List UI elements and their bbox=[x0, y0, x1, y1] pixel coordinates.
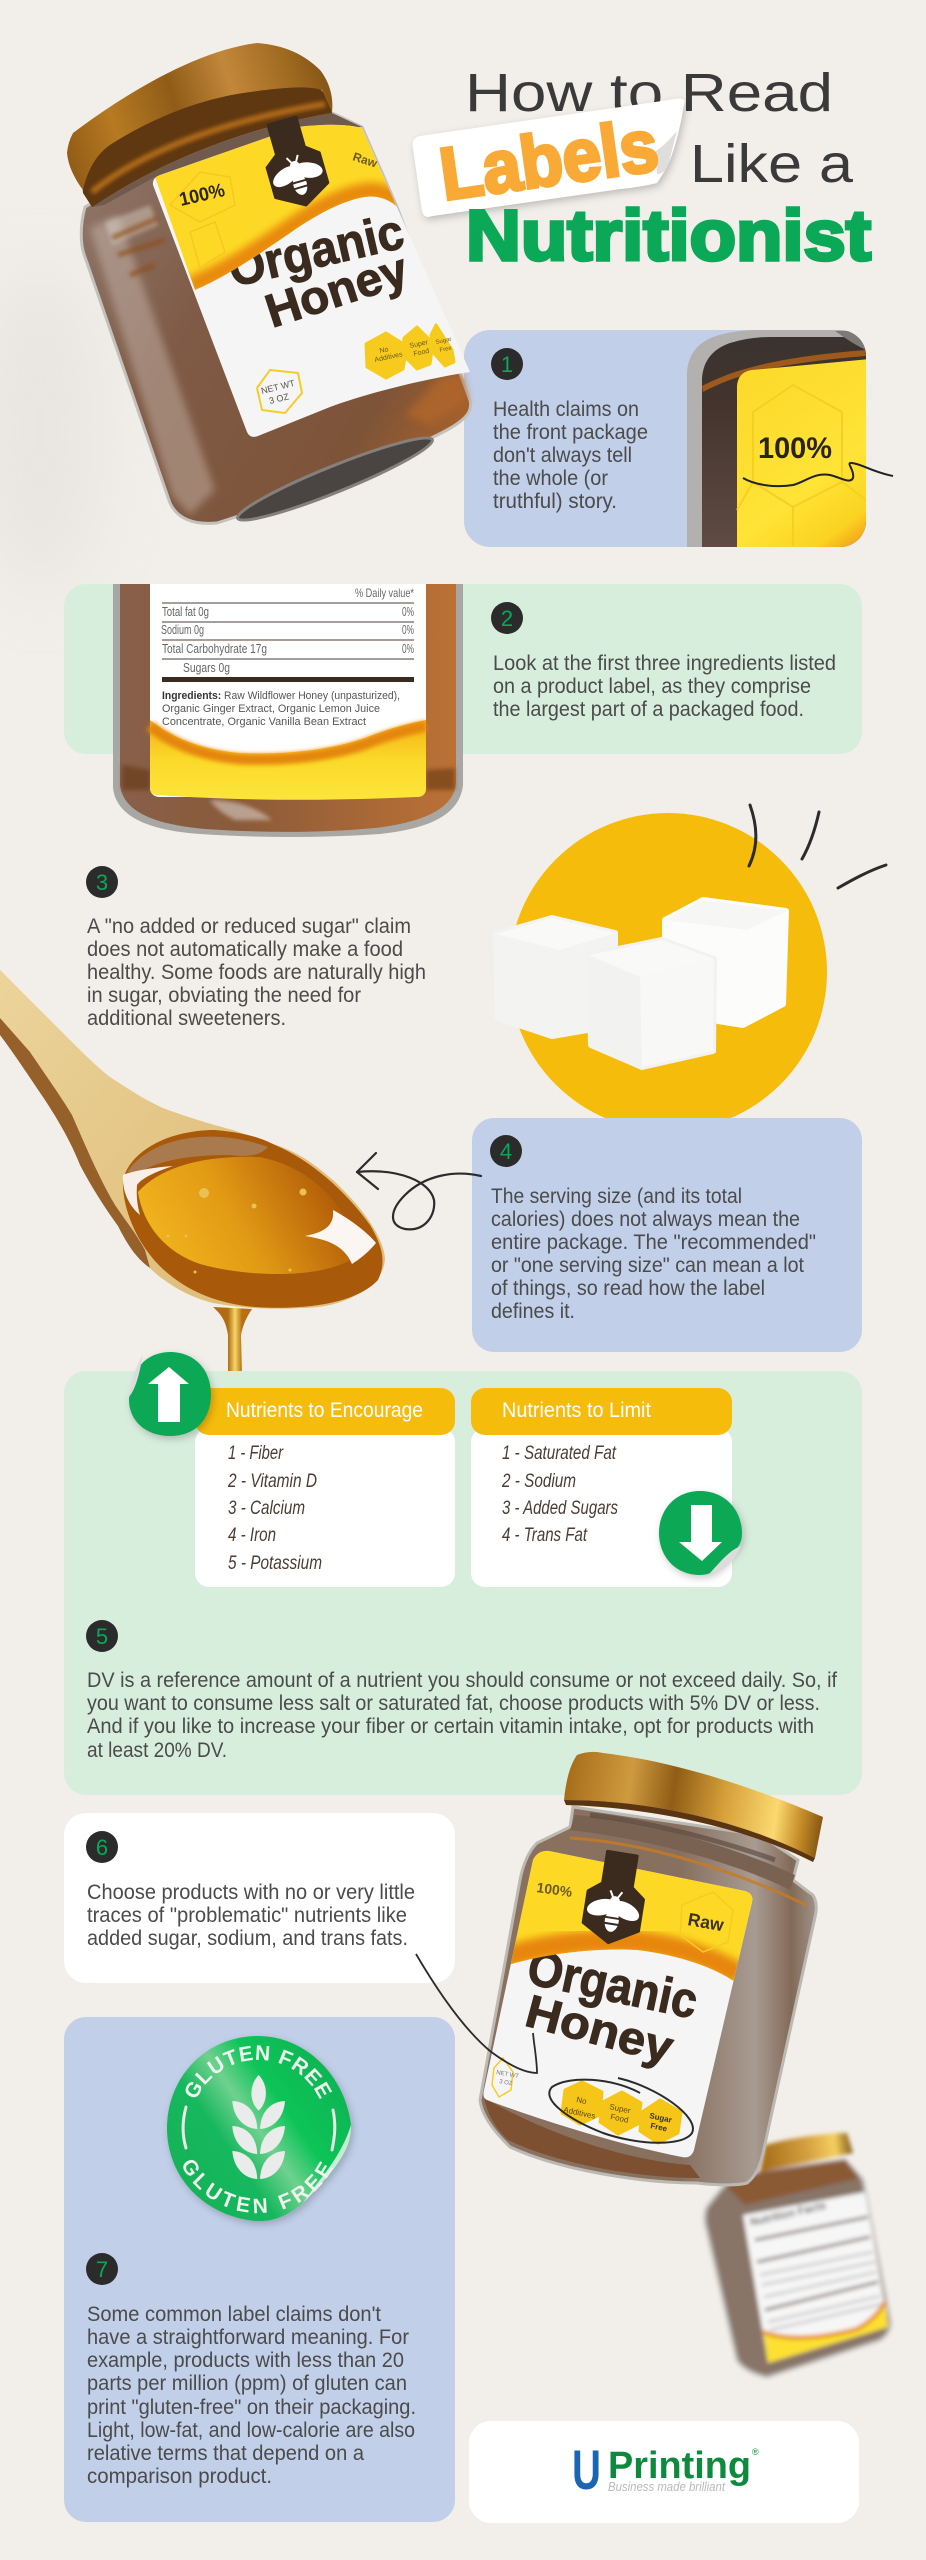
Raw badge: Raw bbox=[351, 150, 379, 171]
arrow to spoon bbox=[357, 1153, 481, 1229]
jar neck bbox=[92, 113, 362, 207]
nutrition label: Ingredients: Raw Wildflower Honey (unpasturized), bbox=[162, 690, 400, 702]
number badge 5: 5 bbox=[96, 1624, 108, 1649]
sugar cube back bbox=[665, 900, 786, 1025]
hexagon claims: Additives bbox=[563, 2105, 596, 2121]
spoon side shadow bbox=[0, 1018, 150, 1268]
net weight badge: 3 OZ bbox=[268, 391, 290, 406]
number badge 5 bbox=[86, 1620, 118, 1652]
panel 7 text: Light, low-fat, and low-calorie are also bbox=[87, 2419, 415, 2442]
icon: down arrow sticker bbox=[659, 1491, 742, 1575]
honey drip bbox=[213, 1307, 252, 1374]
title line: How to Read: How to Read bbox=[465, 63, 833, 123]
number badge 1 bbox=[491, 348, 523, 380]
logo panel bbox=[469, 2421, 859, 2523]
logo: UPrinting: Printing bbox=[608, 2445, 751, 2487]
net weight badge: NET WT bbox=[496, 2070, 520, 2080]
panel 5 text: at least 20% DV. bbox=[87, 1739, 227, 1762]
jar label bbox=[153, 113, 470, 437]
yellow band bbox=[155, 125, 397, 290]
back jar lid bbox=[760, 2133, 853, 2172]
Raw badge bbox=[680, 1892, 733, 1952]
icon: up arrow sticker bbox=[129, 1352, 211, 1436]
panel 6 text bbox=[87, 1881, 415, 1950]
jar lid bbox=[67, 43, 332, 190]
panel 1 text: the whole (or bbox=[493, 467, 608, 490]
number badge 7 bbox=[86, 2253, 118, 2285]
table: nutrients to limit: Nutrients to Limit bbox=[502, 1399, 651, 1422]
product name line 2: Honey bbox=[259, 242, 414, 338]
emphasis ticks bbox=[749, 805, 886, 888]
panel 4 text: defines it. bbox=[491, 1300, 575, 1323]
logo: UPrinting bbox=[572, 2438, 759, 2501]
bee logo bbox=[255, 113, 333, 213]
title line: Like a: Like a bbox=[690, 134, 854, 194]
number badge 2 bbox=[491, 602, 523, 634]
nutrition label: % Daily value* bbox=[355, 586, 414, 600]
spoon handle and bowl bbox=[0, 970, 385, 1309]
number badge 1: 1 bbox=[501, 352, 513, 377]
hexagon claims: Super bbox=[609, 2102, 632, 2115]
panel 5 background bbox=[64, 1371, 862, 1795]
panel 7 text: relative terms that depend on a bbox=[87, 2442, 364, 2465]
panel 4 text: calories) does not always mean the bbox=[491, 1208, 800, 1231]
table: nutrients to encourage: 2 - Vitamin D bbox=[227, 1471, 317, 1492]
nutrition label: 0% bbox=[402, 604, 414, 619]
title bbox=[413, 63, 871, 276]
panel 7 text bbox=[87, 2303, 416, 2488]
panel 6 text: traces of "problematic" nutrients like bbox=[87, 1904, 407, 1927]
logo: UPrinting: ® bbox=[752, 2447, 759, 2457]
panel 5: daily value bbox=[64, 1371, 862, 1795]
panel 2 background bbox=[64, 584, 862, 754]
panel 3 text: in sugar, obviating the need for bbox=[87, 984, 361, 1007]
table: nutrients to encourage bbox=[195, 1388, 455, 1587]
panel 3: no added sugar bbox=[86, 866, 426, 1030]
hand-drawn circle around claims bbox=[549, 2078, 693, 2143]
panel 7 text: parts per million (ppm) of gluten can bbox=[87, 2372, 407, 2395]
honey jar 1 bbox=[67, 43, 471, 530]
nutrition label: Total fat 0g bbox=[162, 604, 209, 619]
panel 1 text: don't always tell bbox=[493, 444, 632, 467]
panel 5 text: DV is a reference amount of a nutrient you should consume or not exceed daily. So, if bbox=[87, 1669, 837, 1692]
panel 1 text: the front package bbox=[493, 421, 648, 444]
sticker bottom text: GLUTEN FREE bbox=[183, 2160, 333, 2214]
jar body bbox=[480, 1807, 816, 2185]
table: nutrients to limit: 1 - Saturated Fat bbox=[502, 1443, 617, 1464]
icon: wheat bbox=[232, 2075, 285, 2179]
title line: Nutritionist: Nutritionist bbox=[466, 197, 871, 276]
hexagon claims bbox=[366, 325, 454, 378]
panel 6 background bbox=[64, 1813, 455, 1983]
table: nutrients to encourage: Nutrients to Encourage bbox=[226, 1399, 423, 1422]
hexagon claims: No bbox=[379, 346, 389, 355]
number badge 6 bbox=[86, 1831, 118, 1863]
panel 3 text: A "no added or reduced sugar" claim bbox=[87, 915, 411, 938]
panel 7 text: have a straightforward meaning. For bbox=[87, 2326, 409, 2349]
jar body bbox=[81, 113, 471, 523]
panel 6: problematic nutrients bbox=[64, 1813, 455, 1983]
hexagon claims: Food bbox=[413, 348, 430, 358]
jar neck bbox=[570, 1815, 795, 1890]
table: nutrients to encourage: 1 - Fiber bbox=[228, 1443, 284, 1464]
jar close-up with 100% label bbox=[687, 330, 866, 547]
100% badge: 100% bbox=[177, 180, 227, 211]
panel 7 text: example, products with less than 20 bbox=[87, 2349, 404, 2372]
number badge 6: 6 bbox=[96, 1835, 108, 1860]
back jar body bbox=[705, 2160, 890, 2377]
panel 5 text: And if you like to increase your fiber or certain vitamin intake, opt for products with bbox=[87, 1715, 814, 1738]
hexagon claims: Free bbox=[650, 2121, 669, 2134]
bee logo bbox=[580, 1849, 651, 1947]
honey jar 2 bbox=[470, 1752, 823, 2185]
panel 2 text: on a product label, as they comprise bbox=[493, 675, 811, 698]
product name: Organic bbox=[523, 1939, 703, 2030]
hexagon claims: Free bbox=[439, 345, 453, 354]
nutrition label: Organic Ginger Extract, Organic Lemon Juice bbox=[162, 703, 380, 715]
panel 3 text: additional sweeteners. bbox=[87, 1007, 286, 1030]
panel 1 text: Health claims on bbox=[493, 398, 639, 421]
hexagon claims: Additives bbox=[374, 351, 404, 364]
panel 7: label claims bbox=[64, 2017, 455, 2522]
panel 1: health claims bbox=[464, 330, 893, 560]
number badge 7: 7 bbox=[96, 2257, 108, 2282]
hexagon claims: Sugar bbox=[435, 337, 452, 346]
pointer line from panel 6 to jar bbox=[416, 1954, 537, 2073]
jar lid bbox=[564, 1752, 823, 1858]
hexagon claims: Food bbox=[610, 2112, 629, 2125]
honey spoon bbox=[0, 970, 385, 1374]
net weight badge bbox=[257, 370, 302, 413]
panel 2 text: the largest part of a packaged food. bbox=[493, 698, 804, 721]
back jar label: Nutrition Facts bbox=[749, 2200, 827, 2229]
Raw badge: Raw bbox=[686, 1909, 726, 1935]
sugar cube left bbox=[496, 918, 615, 1036]
table: nutrients to encourage: 3 - Calcium bbox=[228, 1498, 305, 1519]
panel 5 text bbox=[87, 1669, 837, 1762]
nutrition label jar bbox=[113, 584, 463, 837]
honey pool bbox=[123, 1130, 383, 1308]
hexagon claims: Super bbox=[409, 339, 429, 350]
panel 2 text bbox=[493, 652, 836, 721]
yellow circle bbox=[509, 813, 827, 1131]
panel 4: serving size bbox=[472, 1118, 862, 1352]
panel 1 text bbox=[493, 398, 648, 513]
net weight badge bbox=[492, 2058, 520, 2097]
panel 4 background bbox=[472, 1118, 862, 1352]
panel 3 text: does not automatically make a food bbox=[87, 938, 403, 961]
table: nutrients to limit: 2 - Sodium bbox=[501, 1471, 576, 1492]
panel 4 text: entire package. The "recommended" bbox=[491, 1231, 816, 1254]
hexagon claims: No bbox=[576, 2095, 588, 2106]
sticker top text: GLUTEN FREE bbox=[186, 2045, 332, 2099]
product name: Organic bbox=[223, 203, 409, 298]
back jar label bbox=[743, 2192, 888, 2363]
nutrition label: Total Carbohydrate 17g bbox=[162, 641, 267, 656]
table: nutrients to limit bbox=[471, 1388, 732, 1587]
number badge 2: 2 bbox=[501, 606, 513, 631]
panel 4 text: The serving size (and its total bbox=[491, 1185, 742, 1208]
nutrition label: 0% bbox=[402, 622, 414, 637]
panel 6 text: Choose products with no or very little bbox=[87, 1881, 415, 1904]
sugar cubes illustration bbox=[496, 805, 886, 1131]
soft jar shadow bbox=[0, 260, 110, 600]
nutrition label: 0% bbox=[402, 641, 414, 656]
panel 3 text bbox=[87, 915, 426, 1030]
net weight badge: NET WT bbox=[260, 378, 296, 396]
logo: UPrinting: U bbox=[572, 2438, 601, 2501]
panel 7 text: comparison product. bbox=[87, 2465, 272, 2488]
nutrition label: Sodium 0g bbox=[161, 622, 204, 637]
logo: UPrinting: Business made brilliant bbox=[608, 2479, 726, 2494]
product name line 2: Honey bbox=[520, 1984, 679, 2074]
panel 7 background bbox=[64, 2017, 455, 2522]
panel 1 text: truthful) story. bbox=[493, 490, 617, 513]
panel 4 text: of things, so read how the label bbox=[491, 1277, 765, 1300]
panel 2: ingredients bbox=[64, 584, 862, 754]
nutrition label: Concentrate, Organic Vanilla Bean Extract bbox=[162, 716, 366, 728]
table: nutrients to encourage: 4 - Iron bbox=[228, 1525, 276, 1546]
jar label bbox=[483, 1850, 752, 2158]
table: nutrients to limit: 4 - Trans Fat bbox=[502, 1525, 588, 1546]
table: nutrients to limit: 3 - Added Sugars bbox=[502, 1498, 618, 1519]
squiggle underline bbox=[743, 463, 893, 486]
panel 1 background bbox=[464, 330, 866, 547]
panel 5 text: you want to consume less salt or saturated fat, choose products with 5% DV or less. bbox=[87, 1692, 820, 1715]
sticker: Labels: Labels bbox=[435, 103, 663, 216]
panel 7 text: Some common label claims don't bbox=[87, 2303, 381, 2326]
number badge 4: 4 bbox=[500, 1139, 512, 1164]
yellow band bbox=[510, 1850, 752, 1981]
table: nutrients to encourage: 5 - Potassium bbox=[228, 1553, 322, 1574]
nutrition label: Sugars 0g bbox=[183, 660, 230, 675]
jar close-up with 100% label: 100% bbox=[758, 432, 832, 465]
honey bubbles bbox=[166, 1188, 306, 1274]
net weight badge: 3 OZ bbox=[499, 2079, 513, 2087]
jar glass bbox=[113, 584, 463, 837]
gluten free sticker bbox=[166, 2036, 356, 2228]
nutrition label bbox=[150, 584, 426, 800]
number badge 3 bbox=[86, 866, 118, 898]
panel 7 text: print "gluten-free" on their packaging. bbox=[87, 2396, 416, 2419]
panel 4 text bbox=[491, 1185, 816, 1323]
number badge 3: 3 bbox=[96, 870, 108, 895]
panel 2 text: Look at the first three ingredients listed bbox=[493, 652, 836, 675]
panel 6 text: added sugar, sodium, and trans fats. bbox=[87, 1927, 408, 1950]
blurred back jar bbox=[705, 2133, 890, 2377]
panel 3 text: healthy. Some foods are naturally high bbox=[87, 961, 426, 984]
logo background bbox=[469, 2421, 859, 2523]
panel 4 text: or "one serving size" can mean a lot bbox=[491, 1254, 804, 1277]
100% badge: 100% bbox=[536, 1879, 574, 1900]
hexagon claims: Sugar bbox=[649, 2111, 673, 2125]
number badge 4 bbox=[490, 1135, 522, 1167]
hexagon claims bbox=[562, 2082, 681, 2143]
sugar cube front bbox=[589, 940, 714, 1067]
